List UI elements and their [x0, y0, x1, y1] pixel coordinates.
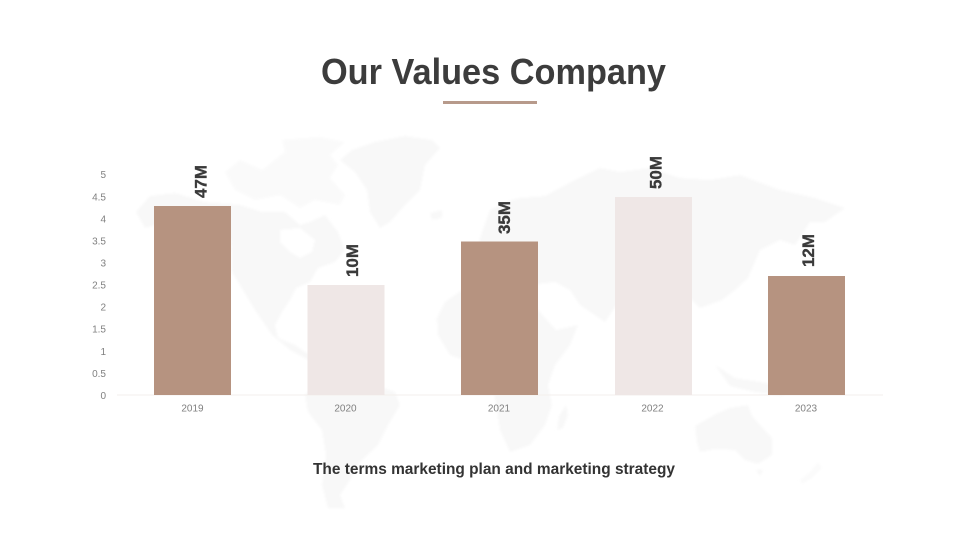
map: South America [305, 378, 400, 508]
y axis labels: 3.5 [92, 236, 106, 248]
y axis labels: 2 [100, 302, 106, 314]
title: Our Values Company [321, 51, 666, 92]
y axis labels: 1.5 [92, 324, 106, 336]
x axis labels: 2022 [641, 404, 664, 414]
title underline [443, 101, 537, 104]
x axis labels: 2021 [488, 404, 511, 414]
map: Greenland [340, 136, 440, 228]
y axis labels: 2.5 [92, 280, 106, 292]
chart baseline [117, 394, 883, 396]
map: Australia [695, 405, 772, 464]
value labels: 47M [192, 165, 210, 198]
value labels: 35M [495, 201, 514, 234]
y axis labels: 0.5 [92, 369, 106, 380]
bar 2023 [768, 276, 845, 395]
y axis labels: 0 [100, 391, 106, 402]
map: Africa [437, 290, 578, 452]
x axis labels: 2020 [334, 404, 357, 414]
map: North America [136, 193, 360, 382]
map: New Zealand [800, 462, 822, 484]
map: Sumatra and Indonesia [715, 365, 790, 396]
y axis labels: 1 [100, 347, 106, 358]
bar 2022 [615, 197, 692, 395]
x axis labels: 2019 [181, 404, 204, 414]
map: Iceland [430, 210, 442, 220]
bar 2020 [308, 285, 384, 395]
bar 2021 [461, 242, 538, 395]
y axis labels: 4 [100, 214, 106, 226]
value labels: 10M [343, 244, 362, 277]
world map backdrop [136, 136, 845, 508]
map: Tasmania [756, 470, 763, 476]
y axis labels: 5 [100, 170, 106, 181]
value labels: 50M [646, 156, 666, 189]
y axis labels: 3 [100, 258, 106, 270]
map: Arctic islands [225, 137, 345, 208]
map: Europe and Asia [470, 168, 845, 332]
value labels [192, 156, 818, 277]
bar 2019 [154, 206, 231, 395]
map: Madagascar [557, 405, 568, 430]
value labels: 12M [799, 234, 818, 267]
y axis labels: 4.5 [92, 192, 106, 204]
caption: The terms marketing plan and marketing strategy [313, 461, 675, 478]
x axis labels: 2023 [795, 404, 818, 414]
map: Hudson Bay cutout [280, 228, 315, 258]
x axis labels [181, 404, 818, 414]
y axis labels [92, 170, 106, 402]
